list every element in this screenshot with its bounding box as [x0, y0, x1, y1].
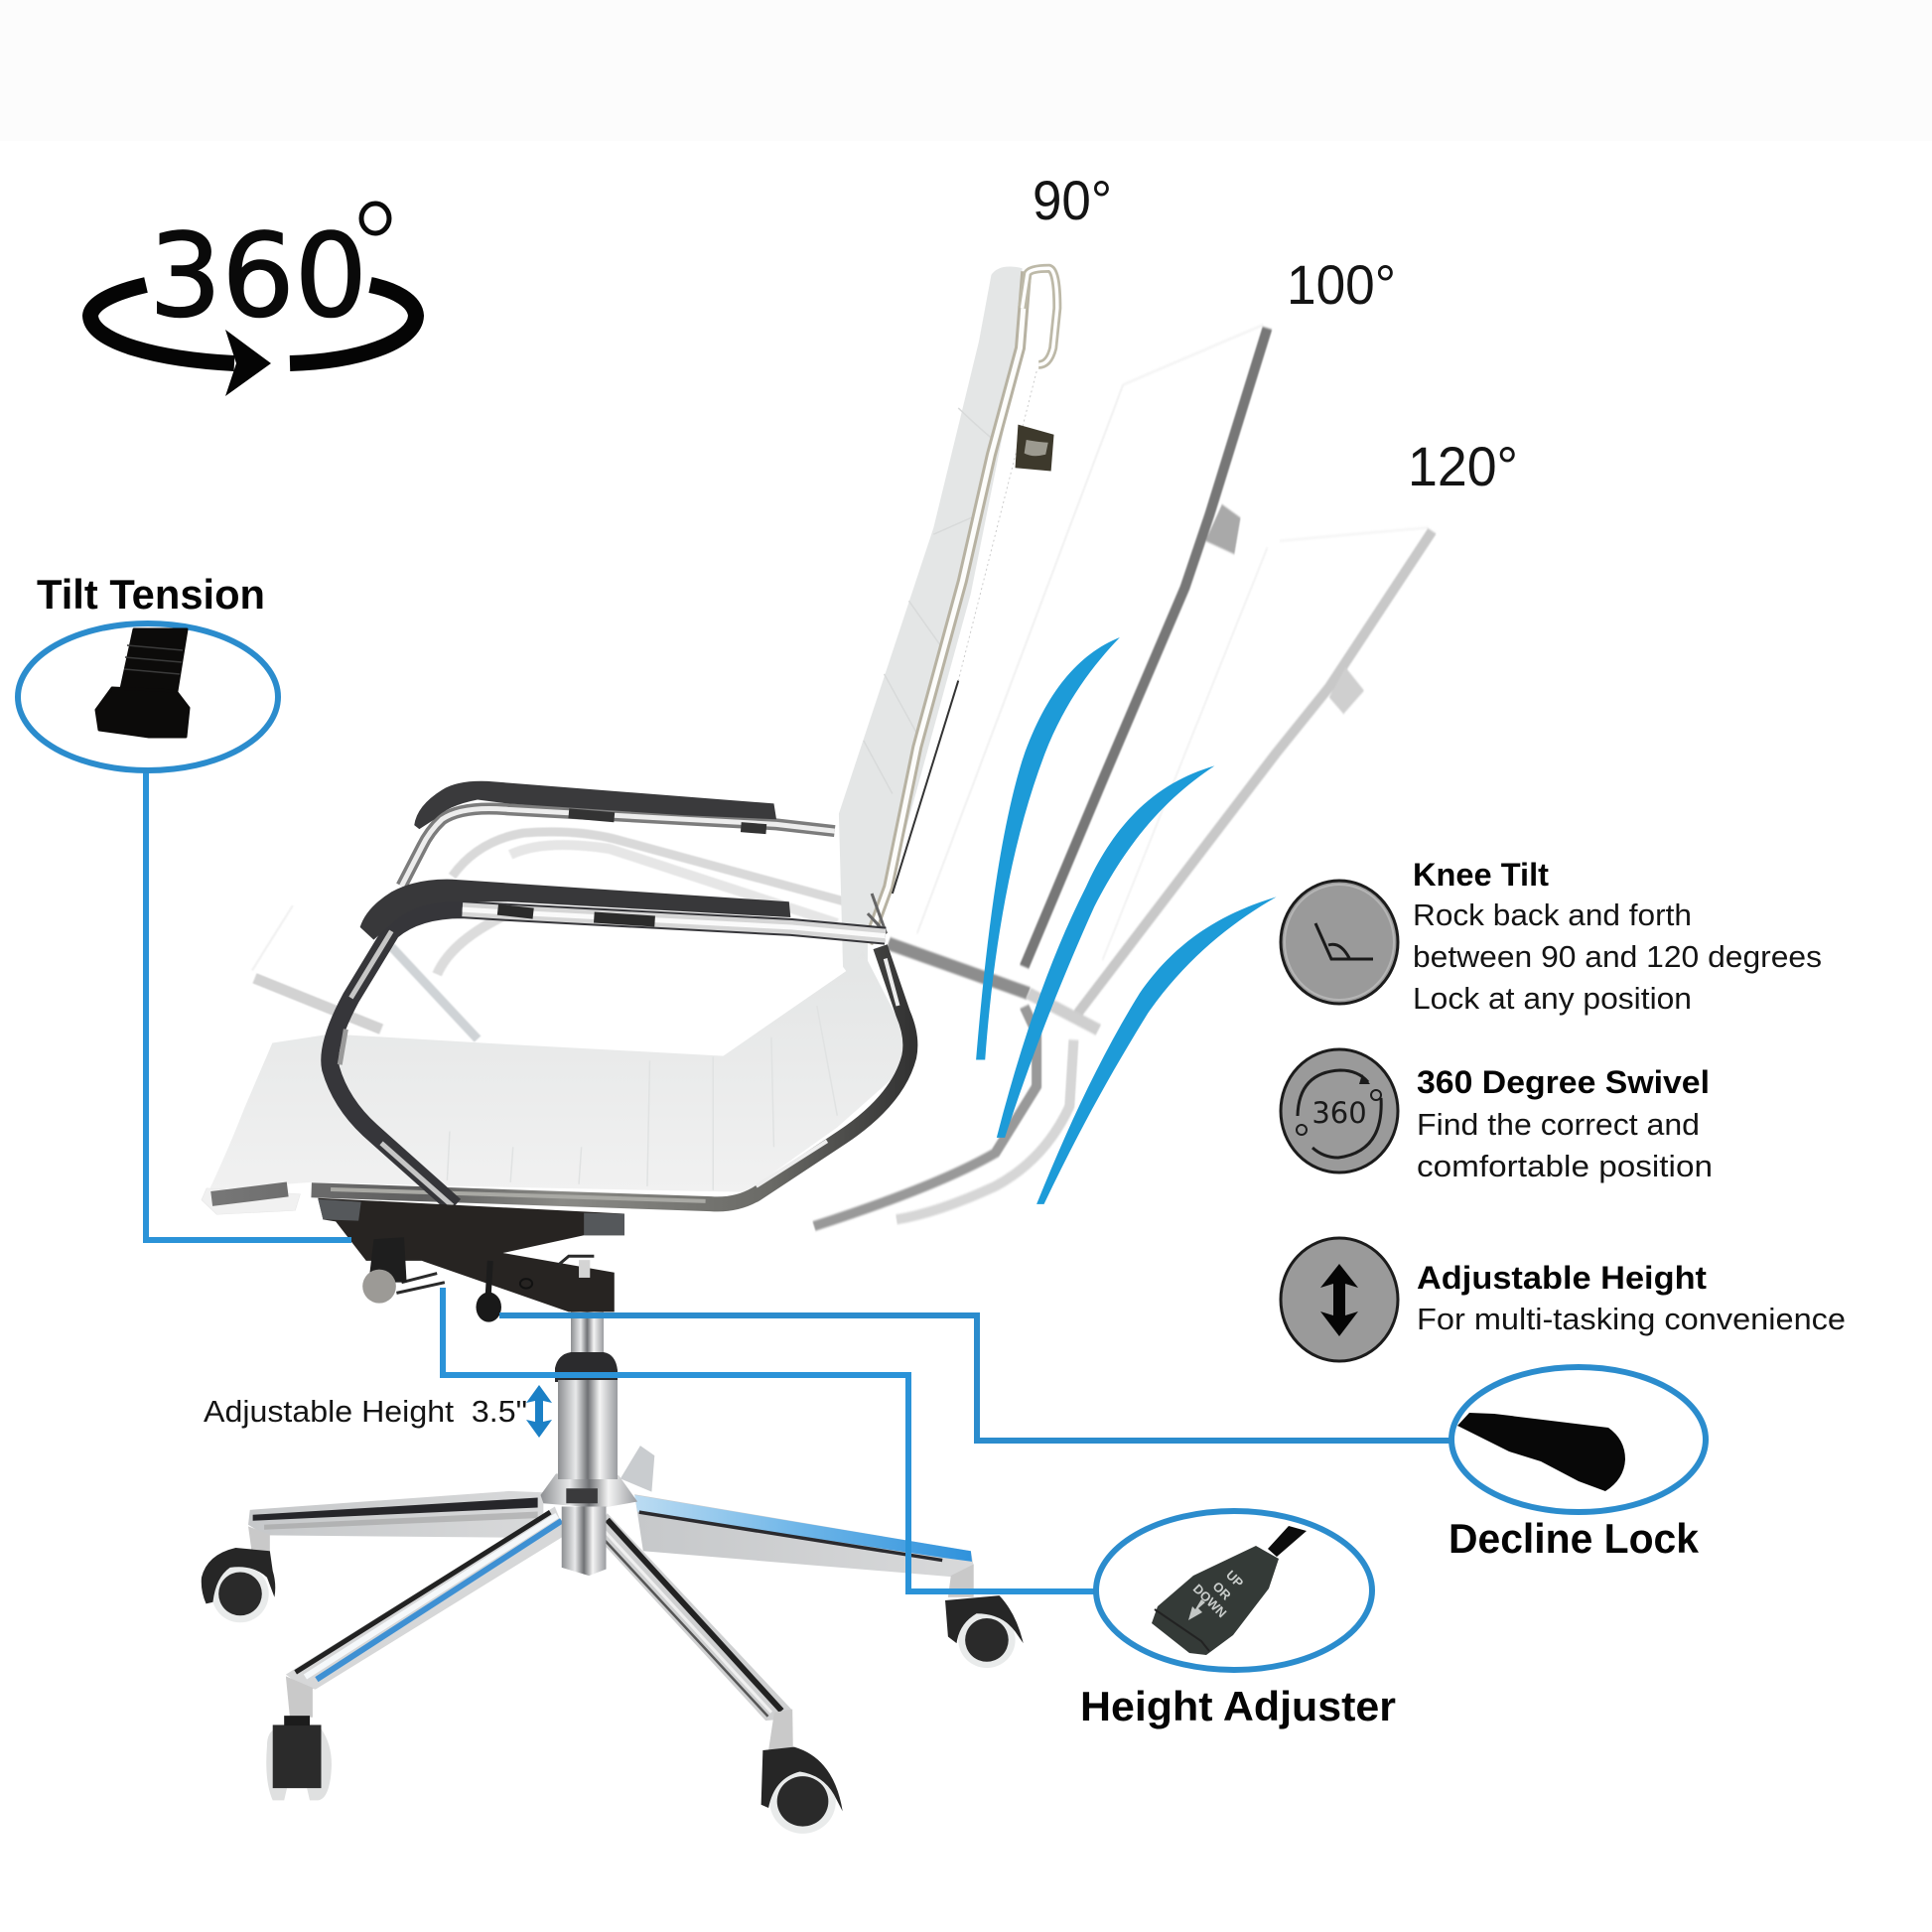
recline swoosh arrows — [976, 637, 1277, 1204]
gas lift post — [555, 1311, 618, 1479]
rear arm tube — [401, 808, 835, 886]
leg: left — [248, 1491, 543, 1538]
feature: 360 degree swivel: comfortable position — [1417, 1149, 1713, 1183]
feature: knee tilt: between 90 and 120 degrees — [1413, 939, 1822, 974]
heading: Tilt Tension — [37, 571, 265, 618]
heading: Height Adjuster — [1080, 1683, 1396, 1729]
feature: 360 degree swivel: Find the correct and — [1417, 1107, 1700, 1142]
swoosh: 90 to 100 — [976, 637, 1120, 1060]
leg: right — [634, 1494, 974, 1577]
icon: bolt — [96, 629, 189, 737]
callout: height adjuster — [1080, 1511, 1396, 1729]
chair: armrests and chrome frame — [330, 781, 886, 1206]
icon: up or down paddle — [1152, 1526, 1307, 1655]
hub — [540, 1473, 637, 1576]
swoosh: 120 end — [1036, 897, 1277, 1204]
feature: adjustable height: For multi-tasking convenience — [1417, 1302, 1846, 1336]
callout: decline lock — [1449, 1367, 1706, 1562]
icon: up or down paddle: UP — [1223, 1568, 1247, 1590]
caster: left — [202, 1548, 275, 1622]
icon: knee tilt — [1281, 881, 1398, 1004]
feature: knee tilt: Knee Tilt — [1413, 857, 1549, 893]
tilt mechanism — [318, 1198, 624, 1322]
leg: front left — [286, 1507, 566, 1690]
callout: tilt tension — [18, 571, 278, 770]
chair: backrest — [839, 267, 1057, 1000]
feature: adjustable height: Adjustable Height — [1417, 1260, 1707, 1296]
caster stems — [248, 1526, 974, 1750]
icon: lever knob — [1457, 1413, 1625, 1491]
tension knob — [362, 1237, 407, 1304]
feature: knee tilt: Rock back and forth — [1413, 897, 1692, 932]
chair base: star legs and casters — [202, 1446, 1024, 1834]
caster: right — [945, 1595, 1024, 1668]
feature: 360 degree swivel: 360 Degree Swivel — [1417, 1064, 1710, 1100]
front side tube — [330, 909, 886, 1206]
icon: up or down paddle: DOWN — [1190, 1581, 1230, 1620]
feature: adjustable height — [1281, 1238, 1846, 1361]
connector line: tilt tension — [146, 772, 351, 1240]
decline lever — [476, 1261, 501, 1322]
ghost chair: 120 degree recline — [897, 528, 1432, 1219]
icon: blue double arrow — [526, 1385, 552, 1438]
caster: front left — [266, 1716, 332, 1800]
icon: height arrows — [1281, 1238, 1398, 1361]
label: 90 degrees: 90° — [1033, 169, 1112, 231]
heading: Decline Lock — [1449, 1515, 1700, 1562]
rear armrest pad — [414, 781, 776, 829]
feature: knee tilt — [1281, 857, 1822, 1016]
connector line: decline lock — [499, 1315, 1451, 1441]
seat rail chrome — [211, 947, 910, 1204]
feature: 360 degree swivel — [1281, 1049, 1713, 1183]
connector line: height adjuster — [443, 1288, 1096, 1591]
icon: swivel — [1281, 1049, 1398, 1173]
icon: swivel: 360 — [1311, 1096, 1367, 1130]
feature: knee tilt: Lock at any position — [1413, 981, 1692, 1016]
swoosh: 100 to 120 — [997, 765, 1214, 1138]
front armrest pad — [360, 880, 790, 940]
icon: up or down paddle: OR — [1209, 1579, 1234, 1603]
chair: seat — [202, 947, 910, 1214]
icon: 360 degree rotation: 360 — [149, 209, 367, 344]
label: 100 degrees: 100° — [1287, 253, 1396, 316]
icon: 360 degree rotation — [90, 204, 416, 396]
text: adjustable height dimension: Adjustable Height 3.5" — [204, 1394, 527, 1429]
ghost chair: 100 degree recline — [814, 325, 1267, 1226]
caster: front right — [761, 1747, 843, 1834]
ghost armrests and seat: forward tilt — [252, 832, 853, 1039]
leg: front right — [595, 1513, 791, 1721]
rear stub leg — [621, 1446, 654, 1492]
label: 120 degrees: 120° — [1408, 435, 1518, 497]
